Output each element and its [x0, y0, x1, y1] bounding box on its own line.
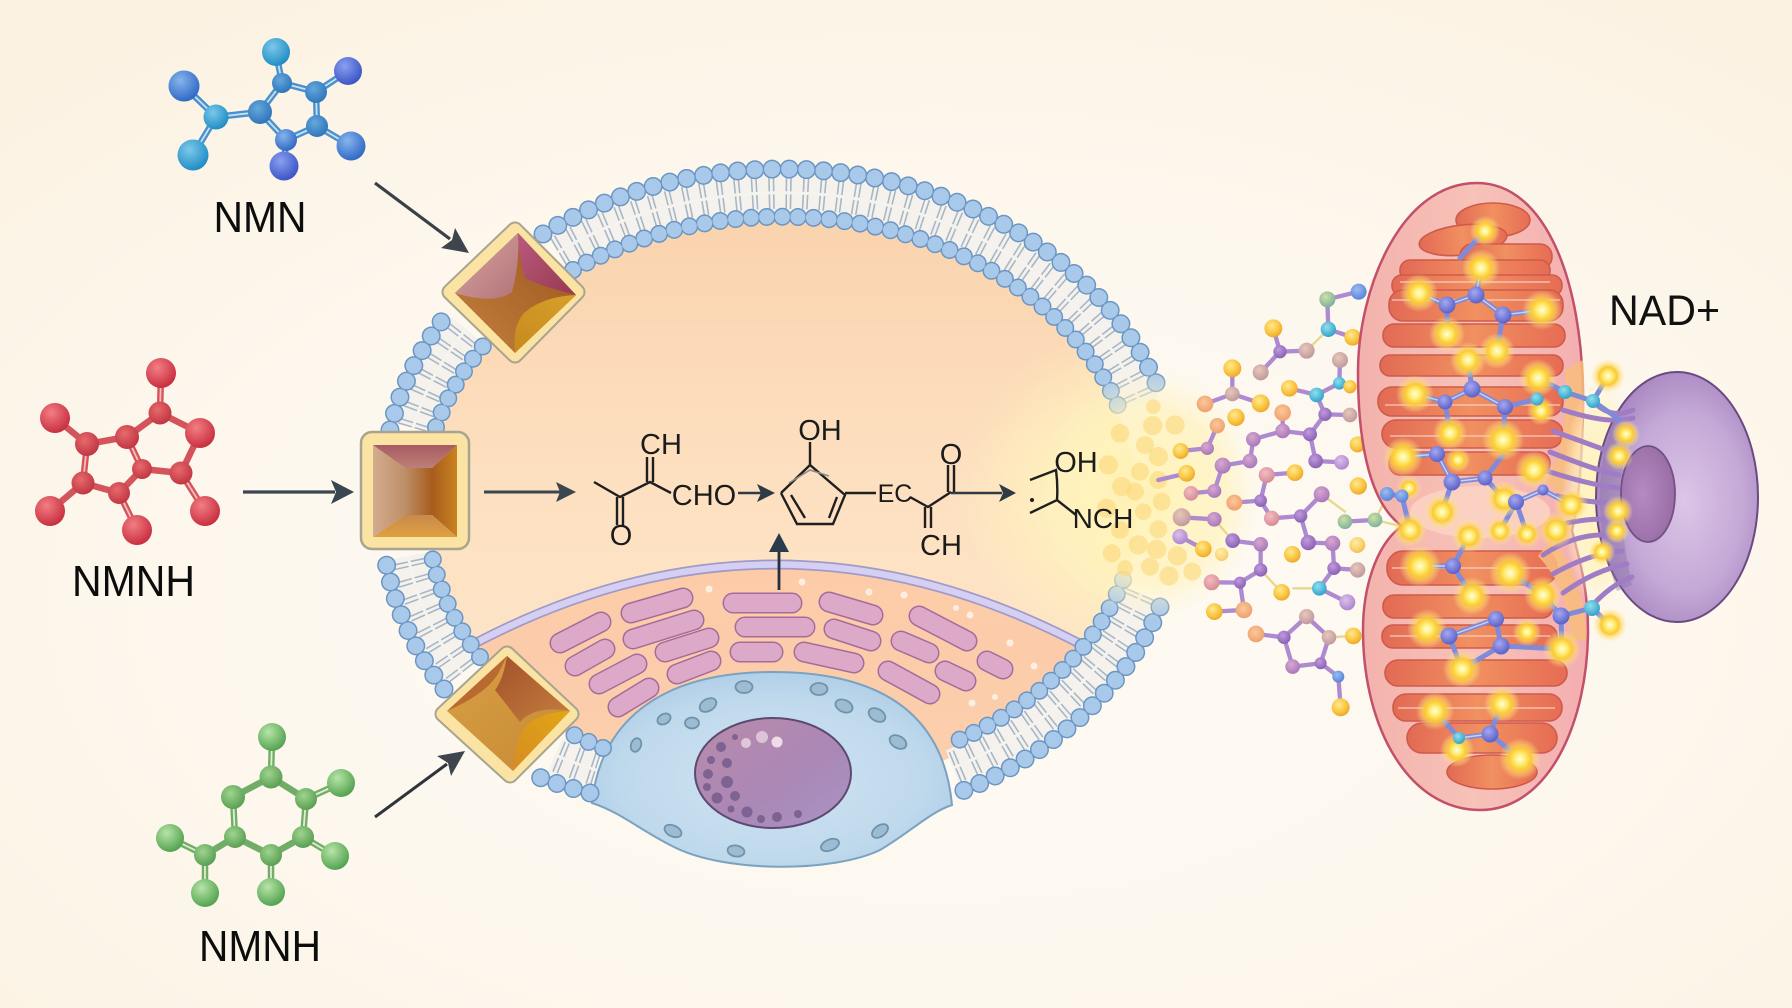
- arrow: square transporter to pathway: [484, 482, 576, 502]
- cell body (blue cytosol): [592, 672, 952, 867]
- cell membrane lipid bilayer: [385, 169, 1162, 793]
- formula text: CH: CH: [920, 530, 962, 562]
- molecule: NMNH red: [35, 358, 220, 545]
- dot: [1030, 498, 1034, 502]
- node atoms: [1380, 286, 1600, 744]
- transporter 3: diamond channel: [443, 654, 571, 775]
- formula text: O: O: [940, 439, 962, 471]
- released yellow particles: [1097, 399, 1201, 586]
- pale highlights between folds: [1385, 282, 1560, 708]
- bonds: [1158, 292, 1375, 707]
- formula text: OH: OH: [1054, 447, 1098, 479]
- arrow: to final product: [951, 484, 1016, 502]
- chemical pathway structures: [594, 415, 1133, 562]
- endoplasmic reticulum rods: [560, 598, 1003, 707]
- label: NAD+: NAD+: [1609, 287, 1720, 335]
- cristae folds: [1378, 203, 1567, 789]
- cell cytoplasm: [430, 221, 1136, 760]
- receptor left shade: [1600, 422, 1632, 591]
- orange crescents near outer edge: [1538, 360, 1586, 640]
- transporter 1: diamond channel: [450, 230, 577, 355]
- label: NMNH (red): NMNH: [72, 557, 195, 606]
- arrow: CHO to ring: [738, 484, 775, 502]
- membrane receptor (purple): [1562, 372, 1758, 622]
- yellow glow at membrane gap: [1040, 370, 1260, 620]
- label: NMNH (green): NMNH: [199, 922, 321, 971]
- nucleus: [695, 718, 851, 828]
- molecule: NMN blue: [168, 38, 366, 180]
- nucleus dots: [703, 734, 802, 823]
- gold and teal connector bonds: [1214, 329, 1410, 637]
- arrow: NMN to transporter: [375, 183, 469, 253]
- formula text: NCH: NCH: [1073, 503, 1133, 534]
- label: NMN: NMN: [214, 193, 306, 242]
- transporter 2: square channel: [361, 432, 469, 549]
- mitochondrion: [1358, 183, 1588, 810]
- molecule: NMNH green: [156, 723, 355, 907]
- formula text: CHO: CHO: [672, 480, 736, 512]
- molecules travelling to mitochondrion: [1158, 284, 1410, 716]
- formula text: CH: CH: [640, 429, 682, 461]
- arrow: green NMNH to transporter: [375, 751, 465, 817]
- ER white specks: [706, 578, 1038, 706]
- connecting purple filaments: [1543, 401, 1633, 608]
- formula text: OH: OH: [798, 415, 842, 447]
- arrow: upward from organelles to ring: [769, 533, 789, 590]
- small blue vesicles: [629, 681, 909, 858]
- bonds: [1387, 231, 1620, 759]
- receptor opening: [1621, 446, 1675, 542]
- glow at waist: [1410, 486, 1550, 538]
- nucleus highlights: [741, 731, 782, 748]
- glowing atoms: [1382, 215, 1641, 781]
- atoms: [1172, 284, 1382, 716]
- endoplasmic reticulum region: [476, 560, 1080, 760]
- formula text: EC: EC: [878, 480, 912, 508]
- formula text: O: O: [610, 520, 632, 552]
- arrow: NMNH to square transporter: [243, 480, 354, 504]
- glowing NAD+ molecules: [1380, 215, 1641, 781]
